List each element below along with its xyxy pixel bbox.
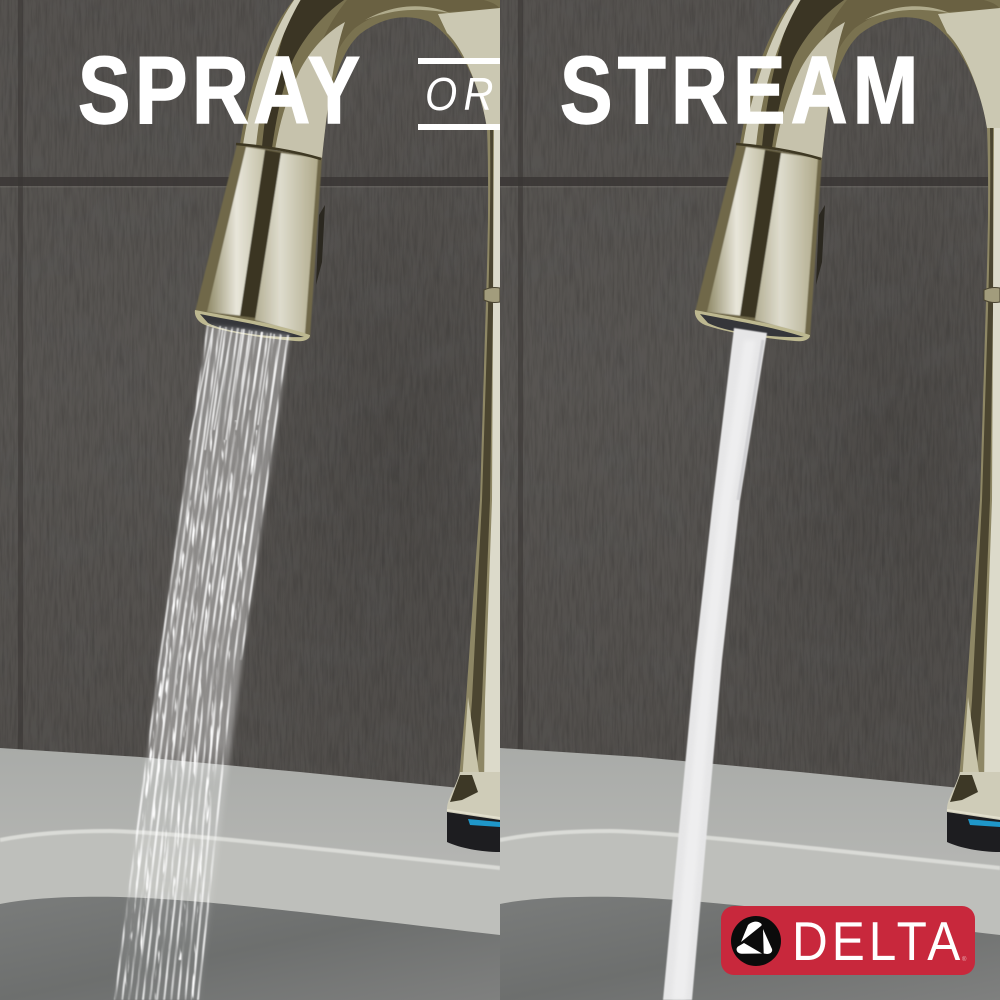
- wall and countertop background: [0, 0, 500, 1000]
- panel: stream (right half): [500, 0, 1000, 1000]
- wall and countertop background: [500, 0, 1000, 1000]
- logo: Delta: [721, 906, 975, 975]
- heading: SPRAY: SPRAY: [78, 37, 360, 144]
- connector: OR with rules: [418, 58, 500, 130]
- logo mark: [731, 916, 781, 966]
- panel: spray (left half): [0, 0, 500, 1000]
- faucet: left: [195, 0, 500, 852]
- faucet: right: [695, 0, 1000, 852]
- registered mark: ®: [962, 956, 967, 963]
- heading: STREAM: STREAM: [560, 37, 918, 144]
- connector: OR with rules: OR: [425, 69, 493, 121]
- water: spray pattern: [115, 325, 290, 1000]
- logo wordmark: DELTA: [792, 912, 960, 973]
- water: solid stream: [663, 328, 767, 1000]
